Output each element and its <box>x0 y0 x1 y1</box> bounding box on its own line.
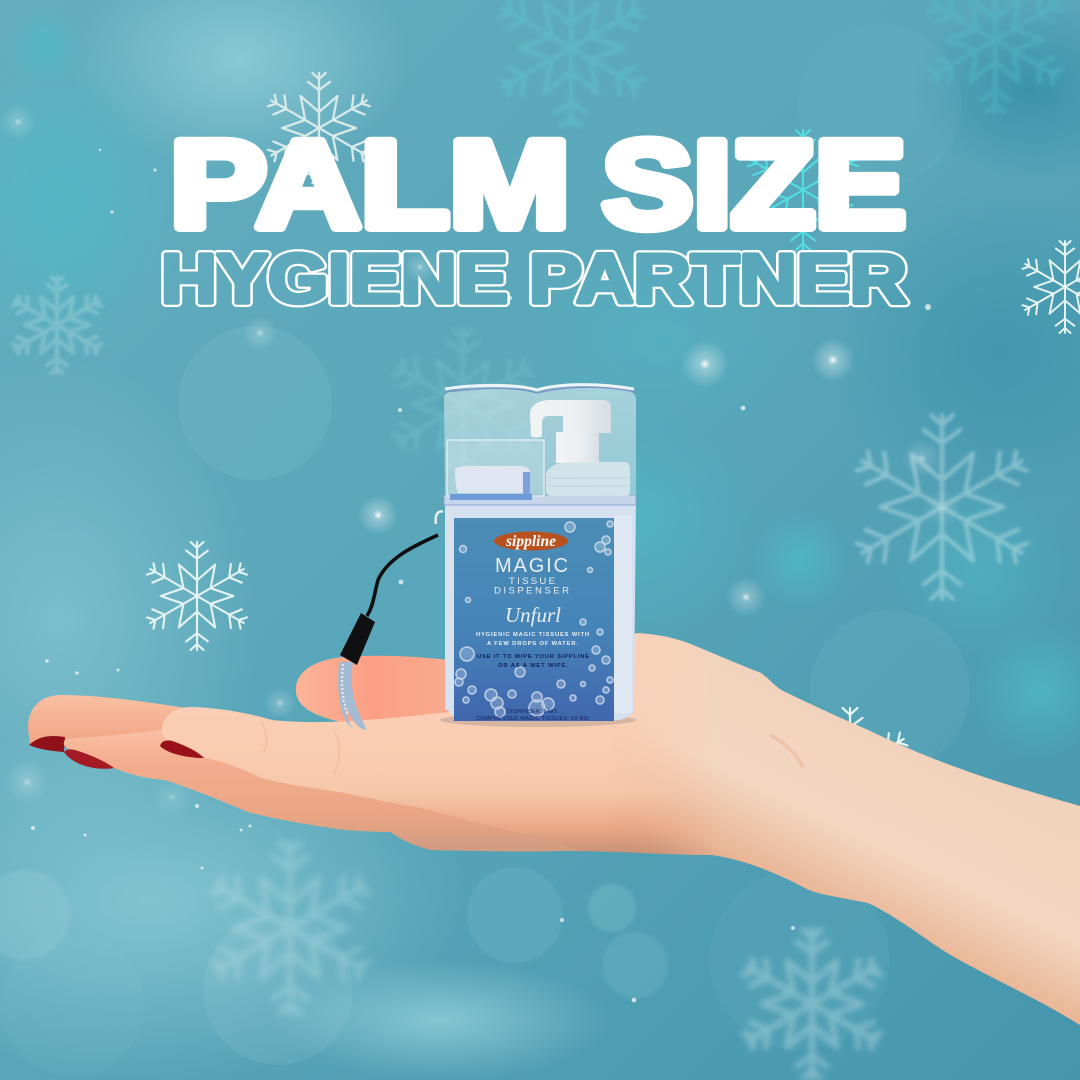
contents copy: COMPRESSED MAGIC TISSUES: 10 NO. <box>476 716 590 722</box>
label copy <box>476 632 589 669</box>
contents copy: DISPENSER: 1 NO. <box>507 709 558 715</box>
icon: snowflake right edge <box>1017 241 1080 333</box>
subtitle: HYGIENE PARTNER outlined <box>161 249 910 308</box>
label <box>454 518 614 721</box>
product name: MAGIC <box>495 555 568 577</box>
nail: index finger <box>160 740 204 758</box>
shadow <box>440 713 636 727</box>
subtitle: HYGIENE PARTNER outlined: PARTNER <box>529 240 907 318</box>
palm surface <box>64 633 1080 1025</box>
pump head <box>530 400 611 438</box>
body <box>445 498 636 721</box>
ring finger and heel of palm <box>64 730 578 852</box>
palm and arm <box>64 633 1080 1025</box>
tissue edge <box>523 472 530 494</box>
product name: TISSUE <box>509 576 555 587</box>
lanyard strap <box>338 511 443 730</box>
icon: snowflake behind title <box>741 130 865 250</box>
right reflection <box>614 515 632 713</box>
product: Magic Tissue Dispenser <box>440 385 636 727</box>
icon: snowflake left <box>141 542 253 650</box>
cord <box>367 535 438 616</box>
label copy: OR AS A WET WIPE. <box>498 663 568 669</box>
left reflection <box>445 505 454 710</box>
subtitle: HYGIENE PARTNER outlined: HYGIENE <box>161 240 508 318</box>
contents copy <box>476 709 590 722</box>
collar <box>444 495 636 505</box>
title: PALM SIZE <box>170 116 906 254</box>
forearm surface <box>640 633 1080 1025</box>
tassel <box>338 662 367 730</box>
label copy: HYGIENIC MAGIC TISSUES WITH <box>476 632 589 638</box>
collar ridges <box>548 478 628 486</box>
icon: snowflake top left <box>262 73 376 183</box>
compressed tissue <box>455 466 530 493</box>
cap rim <box>445 387 636 393</box>
nail: little finger <box>29 736 65 752</box>
cord sleeve <box>340 613 375 665</box>
little finger <box>28 695 240 760</box>
crisp snowflake icons <box>141 73 1080 650</box>
wrist crease <box>770 735 803 768</box>
thumb <box>296 656 450 728</box>
brand logo: sippline <box>505 533 556 550</box>
cap <box>444 386 636 498</box>
bubbles <box>455 521 613 717</box>
cord clip <box>436 511 443 524</box>
product name: DISPENSER <box>494 586 569 596</box>
title: PALM SIZE: PALM <box>170 116 570 254</box>
pump stem <box>556 432 599 463</box>
script word: Unfurl <box>505 603 561 627</box>
title: PALM SIZE: SIZE <box>602 116 906 254</box>
product name <box>494 555 569 596</box>
tassel mesh <box>342 664 348 715</box>
brand logo <box>494 532 568 550</box>
tissue tray <box>450 494 532 500</box>
sparkles and snow dots <box>0 104 962 1002</box>
label copy: USE IT TO WIPE YOUR SIPPLINE <box>477 654 589 660</box>
inner cup <box>447 440 544 496</box>
hand and arm <box>28 633 1080 1025</box>
cap top highlight <box>445 385 634 390</box>
nail: ring finger <box>64 749 114 769</box>
label copy: A FEW DROPS OF WATER. <box>487 641 578 647</box>
pump collar <box>546 462 630 496</box>
knuckle crease <box>262 722 339 775</box>
